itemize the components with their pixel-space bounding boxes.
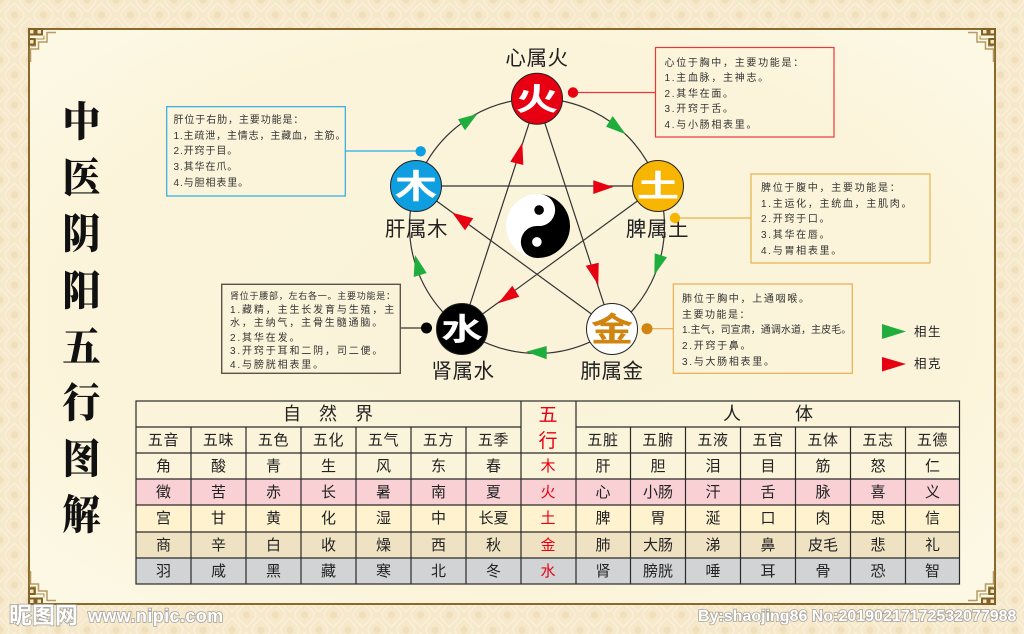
row: metal: 大肠 <box>643 537 673 554</box>
row: wood: 胆 <box>650 458 666 475</box>
callout: lung: 1.主气，司宣肃，通调水道，主皮毛。 <box>682 323 851 336</box>
row: water: 耳 <box>760 563 776 580</box>
row: earth <box>156 510 940 527</box>
column headers: 五体 <box>807 432 839 449</box>
row: metal: 辛 <box>211 537 226 554</box>
row: wood: 怒 <box>870 458 886 475</box>
row: water: 北 <box>431 563 446 580</box>
row: wood: 木 <box>540 458 556 475</box>
callout: spleen: 1.主运化，主统血，主肌肉。 <box>761 197 913 210</box>
watermark: site: 昵图网 <box>9 602 78 628</box>
callout: heart: 心位于胸中，主要功能是： <box>664 56 805 69</box>
row: fire: 夏 <box>486 484 501 501</box>
node: fire: 火 <box>516 82 558 117</box>
row: metal: 商 <box>156 537 171 554</box>
row: water: 羽 <box>156 563 171 580</box>
callout: spleen: 脾位于腹中，主要功能是： <box>761 181 901 194</box>
row: wood <box>156 458 940 475</box>
callout: liver <box>167 107 426 196</box>
callout: spleen: 3.其华在唇。 <box>761 228 831 241</box>
title: 五 <box>62 325 101 370</box>
callout: kidney: 1.藏精，主生长发育与生殖，主 <box>230 303 396 316</box>
label: lung: 肺属金 <box>580 360 644 383</box>
row: metal: 皮毛 <box>808 537 838 554</box>
row: earth: 化 <box>321 510 336 527</box>
row: wood: 角 <box>156 458 171 475</box>
column headers <box>148 431 948 449</box>
row: water: 冬 <box>486 563 501 580</box>
row: fire <box>156 484 940 501</box>
node: fire <box>512 73 562 124</box>
row: metal: 燥 <box>376 537 391 554</box>
row: earth: 信 <box>925 510 940 527</box>
red restraining arrows <box>452 143 613 303</box>
row: fire: 徵 <box>156 484 171 501</box>
row: earth: 黄 <box>266 510 281 527</box>
section heading: human body: 体 <box>795 404 813 424</box>
row: fire: 义 <box>925 484 940 501</box>
row: earth: 土 <box>540 510 556 527</box>
row: metal: 悲 <box>870 537 886 554</box>
row: metal <box>156 537 940 554</box>
section heading: nature: 自 然 界 <box>283 404 373 424</box>
callout: heart: 2.其华在面。 <box>664 87 735 100</box>
section heading: human body: 人 <box>723 404 741 424</box>
column headers: 五德 <box>917 431 948 449</box>
legend <box>882 324 942 372</box>
row: earth: 脾 <box>595 510 611 527</box>
column headers: 五方 <box>423 432 454 449</box>
corner ornament: bottom right <box>968 571 995 604</box>
row: metal: 肺 <box>595 537 611 554</box>
row: metal: 秋 <box>486 537 501 554</box>
yin yang symbol <box>504 192 572 260</box>
callout: kidney: 肾位于腰部，左右各一。主要功能是： <box>230 290 396 301</box>
node: earth: 土 <box>637 169 679 204</box>
section heading: wuxing <box>538 405 558 452</box>
row: wood: 肝 <box>595 458 611 475</box>
column headers: 五季 <box>478 432 509 449</box>
row: fire: 长 <box>321 484 336 501</box>
row: earth: 涎 <box>705 510 721 527</box>
row: water: 膀胱 <box>643 563 673 580</box>
label: kidney: 肾属水 <box>431 360 495 383</box>
corner ornament: top right <box>968 29 995 62</box>
row: fire: 南 <box>431 484 446 501</box>
label: spleen: 脾属土 <box>626 218 689 241</box>
title: 中 <box>62 100 101 145</box>
callout: spleen: 2.开窍于口。 <box>761 212 831 225</box>
row: earth: 肉 <box>815 510 831 527</box>
callout: kidney: 3.开窍于耳和二阴，司二便。 <box>230 344 384 357</box>
callout: kidney: 2.其华在发。 <box>230 331 301 344</box>
callout: lung: 3.与大肠相表里。 <box>682 355 776 368</box>
title: 阳 <box>62 269 101 314</box>
row: metal: 西 <box>431 537 446 554</box>
restraining star lines <box>416 99 658 329</box>
row: water: 咸 <box>211 563 226 580</box>
node: wood: 木 <box>395 168 437 206</box>
callout: liver: 2.开窍于目。 <box>174 144 238 157</box>
row: wood: 酸 <box>211 458 226 475</box>
column headers: 五官 <box>752 432 784 449</box>
callout: spleen <box>670 174 930 263</box>
green generating arrows <box>414 114 667 359</box>
row: fire: 暑 <box>376 484 391 501</box>
row: wood: 风 <box>376 458 391 475</box>
row: wood: 目 <box>760 458 776 475</box>
callout: kidney: 水，主纳气，主骨生髓通脑。 <box>230 316 384 329</box>
row: earth: 宫 <box>156 510 171 527</box>
table <box>136 401 960 584</box>
watermark: author: By:shaojing86 No:20190217172532077988 <box>698 608 1017 625</box>
row: earth: 思 <box>870 510 886 527</box>
column headers: 五化 <box>313 432 344 449</box>
row: wood: 筋 <box>815 458 831 475</box>
row: earth: 胃 <box>650 510 666 527</box>
column headers: 五味 <box>203 432 234 449</box>
column headers: 五志 <box>862 432 894 449</box>
column headers: 五腑 <box>642 432 674 449</box>
row: metal: 白 <box>266 537 281 554</box>
row: water: 黑 <box>266 563 281 580</box>
row: fire: 汗 <box>705 484 721 501</box>
callout: liver: 4.与胆相表里。 <box>174 176 249 189</box>
row: water: 藏 <box>321 563 336 580</box>
row: fire: 喜 <box>870 484 886 501</box>
node: wood <box>390 160 442 212</box>
row: earth: 甘 <box>211 510 226 527</box>
table grid <box>136 401 960 584</box>
row: fire: 小肠 <box>643 484 673 501</box>
row: water: 智 <box>925 562 940 580</box>
node: metal <box>586 304 638 354</box>
row: wood: 春 <box>486 458 501 475</box>
row fills <box>136 479 960 584</box>
column headers: 五液 <box>697 432 729 449</box>
callout: heart <box>568 48 834 137</box>
row: fire: 火 <box>540 484 556 501</box>
callout: lung: 主要功能是： <box>682 308 751 321</box>
row: fire: 舌 <box>760 484 776 501</box>
callout: lung: 肺位于胸中，上通咽喉。 <box>682 292 811 305</box>
row: water: 骨 <box>815 563 831 580</box>
column headers: 五脏 <box>587 432 619 449</box>
row: water: 唾 <box>705 563 721 580</box>
row: wood: 生 <box>321 458 336 475</box>
generating cycle circle <box>410 98 664 354</box>
callout: liver: 肝位于右肋，主要功能是： <box>174 113 304 126</box>
callout: lung <box>642 284 852 373</box>
callout: kidney <box>222 284 432 373</box>
row: wood: 东 <box>431 458 446 475</box>
row: water: 寒 <box>376 562 391 580</box>
row: fire: 苦 <box>211 484 226 501</box>
node: water: 水 <box>441 312 483 347</box>
legend: restraining: 相克 <box>914 357 942 371</box>
row: earth: 中 <box>431 510 446 527</box>
callout: lung: 2.开窍于鼻。 <box>682 339 752 352</box>
callout: kidney: 4.与膀胱相表里。 <box>230 358 325 371</box>
row: wood: 泪 <box>705 458 721 475</box>
node: metal: 金 <box>591 311 633 349</box>
row: metal: 涕 <box>705 537 721 554</box>
corner ornament: bottom left <box>29 571 56 604</box>
callout: spleen: 4.与胃相表里。 <box>761 244 843 257</box>
row: fire: 赤 <box>266 484 281 501</box>
row: wood: 青 <box>266 458 281 475</box>
column headers: 五色 <box>258 432 289 449</box>
callout: heart: 3.开窍于舌。 <box>664 102 735 115</box>
section heading: wuxing: 五 <box>538 405 558 426</box>
row: water <box>156 562 940 580</box>
label: heart: 心属火 <box>505 47 569 70</box>
watermark: site <box>9 602 224 628</box>
section heading: wuxing: 行 <box>538 430 558 452</box>
watermark: site: www.nipic.com <box>87 606 224 626</box>
row: metal: 鼻 <box>760 537 776 554</box>
node: water <box>436 304 488 354</box>
row: fire: 心 <box>595 484 611 501</box>
callout: liver: 1.主疏泄，主情志，主藏血，主筋。 <box>174 129 346 142</box>
row: earth: 湿 <box>376 510 391 527</box>
title: 医 <box>62 156 101 201</box>
title <box>62 100 101 538</box>
legend: generating: 相生 <box>914 325 942 339</box>
corner ornament: top left <box>29 29 56 62</box>
row: water: 肾 <box>595 563 611 580</box>
row: wood: 仁 <box>925 458 940 475</box>
row: water: 水 <box>540 563 556 580</box>
node: earth <box>632 160 684 212</box>
five elements diagram <box>385 47 689 383</box>
row: fire: 脉 <box>815 484 831 501</box>
row: water: 恐 <box>870 563 886 580</box>
title: 图 <box>62 437 101 482</box>
row: metal: 金 <box>540 537 556 554</box>
row: earth: 口 <box>760 510 776 527</box>
row: metal: 礼 <box>925 537 940 554</box>
callout: heart: 4.与小肠相表里。 <box>664 118 758 131</box>
label: liver: 肝属木 <box>385 218 448 241</box>
section heading: human body <box>723 404 813 424</box>
callout: heart: 1.主血脉，主神志。 <box>664 71 770 84</box>
title: 解 <box>62 493 101 538</box>
row: earth: 长夏 <box>478 510 509 527</box>
title: 行 <box>62 381 101 426</box>
column headers: 五音 <box>148 432 179 449</box>
title: 阴 <box>62 212 101 257</box>
row: metal: 收 <box>321 537 336 554</box>
callout: liver: 3.其华在爪。 <box>174 160 238 173</box>
column headers: 五气 <box>368 432 399 449</box>
